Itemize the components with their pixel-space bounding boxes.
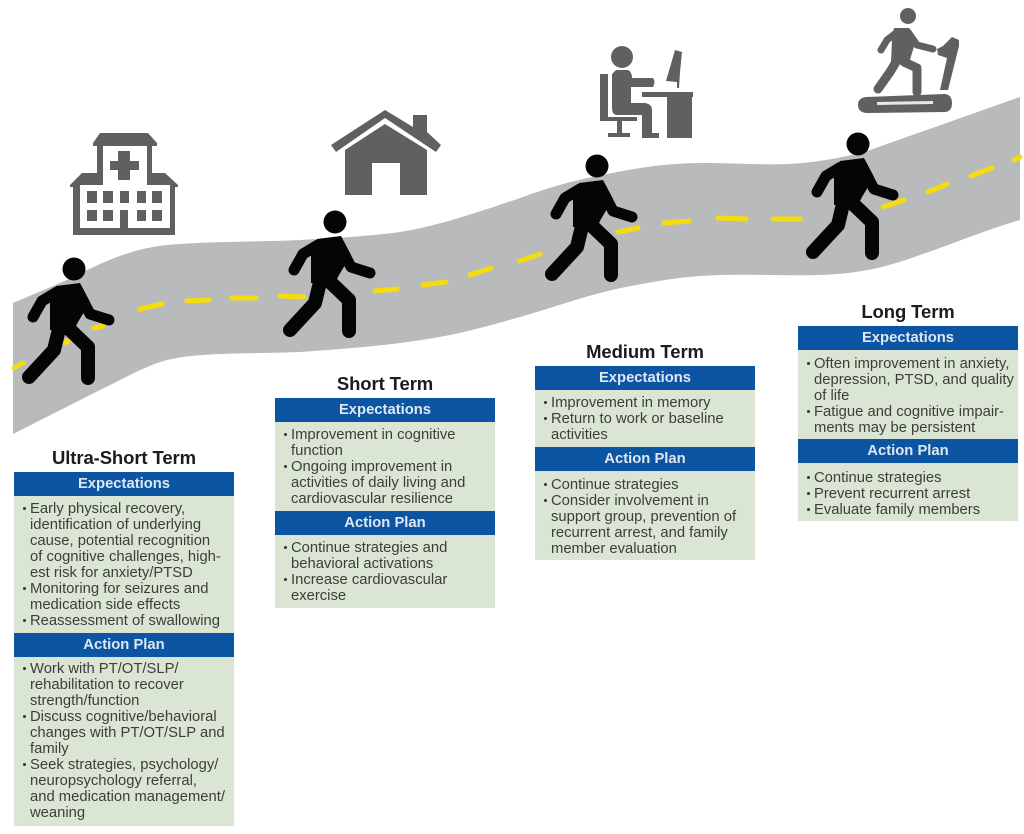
action plan list: Consider involvement in [551,493,709,509]
action plan list: Increase cardiovascular [291,572,447,588]
expectations list: of cognitive challenges, high- [30,549,221,565]
action plan header [14,633,234,657]
action plan header: Action Plan [344,515,426,531]
expectations list: cardiovascular resilience [291,491,453,507]
expectations header [535,366,755,390]
expectations list [284,427,465,507]
expectations list: est risk for anxiety/PTSD [30,565,193,581]
panel: long term [798,301,1018,521]
action plan background [275,535,495,608]
expectations list: function [291,443,343,459]
action plan list: strength/function [30,693,139,709]
expectations list: Monitoring for seizures and [30,581,208,597]
action plan list: support group, prevention of [551,509,736,525]
expectations list: Improvement in memory [551,395,711,411]
expectations list: Fatigue and cognitive impair- [814,404,1004,420]
expectations list [807,356,1014,436]
expectations background [535,390,755,447]
expectations list: Improvement in cognitive [291,427,456,443]
action plan header [275,511,495,535]
expectations list: Ongoing improvement in [291,459,452,475]
expectations header: Expectations [599,370,691,386]
expectations background [14,496,234,633]
action plan header: Action Plan [83,637,165,653]
action plan list [807,470,980,518]
expectations header [798,326,1018,350]
action plan list: Discuss cognitive/behavioral [30,709,217,725]
action plan header [535,447,755,471]
heading: ultra-short term: Ultra-Short Term [52,447,196,468]
expectations list: Reassessment of swallowing [30,613,220,629]
action plan list: changes with PT/OT/SLP and [30,725,225,741]
action plan list: member evaluation [551,541,677,557]
heading: short term: Short Term [337,373,433,394]
action plan header: Action Plan [604,451,686,467]
expectations list: Return to work or baseline [551,411,724,427]
expectations list: Often improvement in anxiety, [814,356,1009,372]
action plan list: neuropsychology referral, [30,773,197,789]
action plan list: Continue strategies and [291,540,447,556]
expectations list: medication side effects [30,597,180,613]
action plan list: Evaluate family members [814,502,980,518]
action plan list: rehabilitation to recover [30,677,184,693]
action plan background [14,657,234,826]
action plan list: behavioral activations [291,556,433,572]
expectations header: Expectations [339,402,431,418]
action plan list: family [30,741,69,757]
heading: medium term: Medium Term [586,341,704,362]
expectations header: Expectations [78,476,170,492]
action plan list: Work with PT/OT/SLP/ [30,661,179,677]
action plan list: exercise [291,588,346,604]
action plan list: recurrent arrest, and family [551,525,728,541]
expectations header [275,398,495,422]
action plan list: Prevent recurrent arrest [814,486,970,502]
expectations list: activities [551,427,608,443]
expectations list: Early physical recovery, [30,501,185,517]
action plan list: Continue strategies [814,470,942,486]
action plan list: weaning [30,805,85,821]
action plan list [23,661,225,821]
expectations list [23,501,221,629]
expectations list: ments may be persistent [814,420,975,436]
heading: long term: Long Term [861,301,955,322]
action plan list: Continue strategies [551,477,678,493]
action plan list [544,477,736,557]
expectations list: identification of underlying [30,517,201,533]
expectations header: Expectations [862,330,954,346]
action plan background [535,471,755,560]
panel: medium term [535,341,755,560]
action plan background [798,463,1018,521]
expectations list: cause, potential recognition [30,533,210,549]
expectations list: depression, PTSD, and quality [814,372,1014,388]
action plan header: Action Plan [867,443,949,459]
panel: ultra-short term [14,447,234,826]
action plan list [284,540,448,604]
action plan list: and medication management/ [30,789,225,805]
expectations list: activities of daily living and [291,475,465,491]
expectations background [275,422,495,511]
expectations list: of life [814,388,849,404]
panel: short term [275,373,495,608]
expectations list [544,395,724,443]
expectations background [798,350,1018,439]
action plan header [798,439,1018,463]
action plan list: Seek strategies, psychology/ [30,757,218,773]
expectations header [14,472,234,496]
